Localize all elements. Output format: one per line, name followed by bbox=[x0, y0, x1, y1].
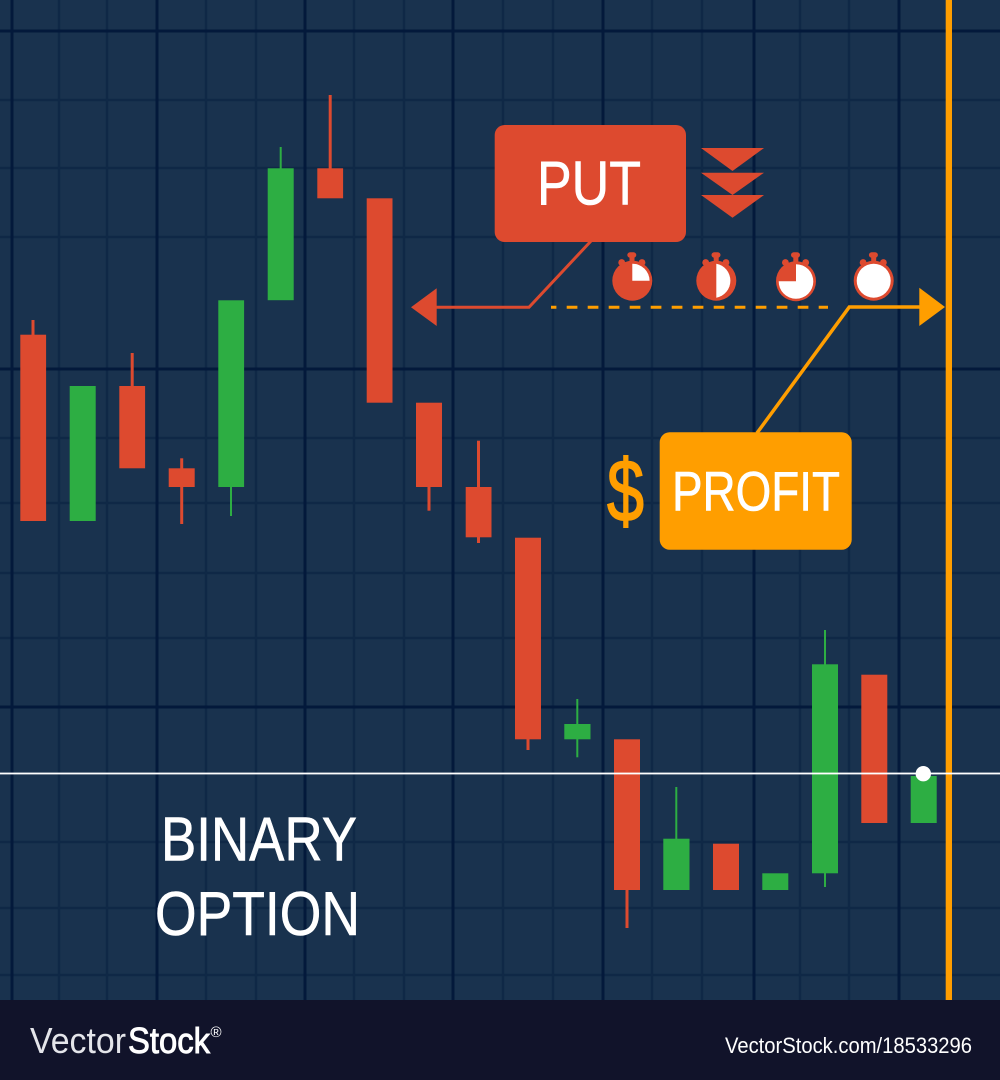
candle 4 red bbox=[169, 458, 195, 524]
PROFIT label: PROFIT bbox=[672, 460, 840, 523]
title: BINARY bbox=[161, 806, 357, 875]
candle 18 red bbox=[861, 675, 887, 823]
icon: dollar sign: $ bbox=[607, 441, 644, 540]
candle 2 green bbox=[70, 386, 96, 521]
footer logo: Vector bbox=[30, 1020, 126, 1061]
title: OPTION bbox=[155, 880, 360, 949]
icon: stopwatch half bbox=[696, 252, 736, 301]
candlestick chart bbox=[20, 95, 937, 928]
candle 7 red bbox=[317, 95, 343, 198]
candle 11 red bbox=[515, 538, 541, 750]
title bbox=[155, 806, 360, 949]
candle 10 red bbox=[466, 441, 492, 543]
icon: stopwatch quarter bbox=[612, 252, 652, 301]
candle 5 green bbox=[218, 300, 244, 516]
PROFIT leader arrow bbox=[757, 288, 945, 433]
candle 6 green bbox=[268, 147, 294, 300]
candle 3 red bbox=[119, 353, 145, 468]
candle 17 green bbox=[812, 630, 838, 887]
current price line bbox=[0, 773, 1000, 774]
candle 12 green bbox=[564, 699, 590, 757]
icon: triple down chevrons bbox=[701, 148, 764, 218]
candle 14 green bbox=[663, 787, 690, 890]
candle 16 green bbox=[762, 873, 788, 890]
footer logo: Stock bbox=[128, 1020, 211, 1061]
candle 13 red bbox=[614, 739, 640, 928]
PUT callout bbox=[411, 125, 686, 326]
candle 1 red bbox=[20, 320, 46, 521]
footer image id: VectorStock.com/18533296 bbox=[725, 1033, 972, 1058]
candle 8 red bbox=[367, 198, 392, 403]
PUT leader arrow bbox=[411, 241, 591, 326]
icon: stopwatch three quarters bbox=[776, 252, 816, 301]
icon: stopwatch full bbox=[854, 252, 894, 301]
footer logo: ® bbox=[210, 1024, 222, 1041]
candle 19 green bbox=[911, 776, 937, 823]
current price marker bbox=[916, 766, 931, 781]
dashed time line bbox=[551, 306, 828, 309]
candle 9 red bbox=[416, 403, 442, 511]
expiry line bbox=[946, 0, 952, 1000]
PUT label: PUT bbox=[537, 149, 641, 218]
PROFIT box bbox=[660, 432, 852, 550]
PROFIT callout bbox=[660, 288, 945, 550]
candle 15 red bbox=[713, 844, 739, 890]
footer bar bbox=[0, 1000, 1000, 1080]
PUT box bbox=[495, 125, 686, 242]
footer logo bbox=[30, 1020, 222, 1061]
